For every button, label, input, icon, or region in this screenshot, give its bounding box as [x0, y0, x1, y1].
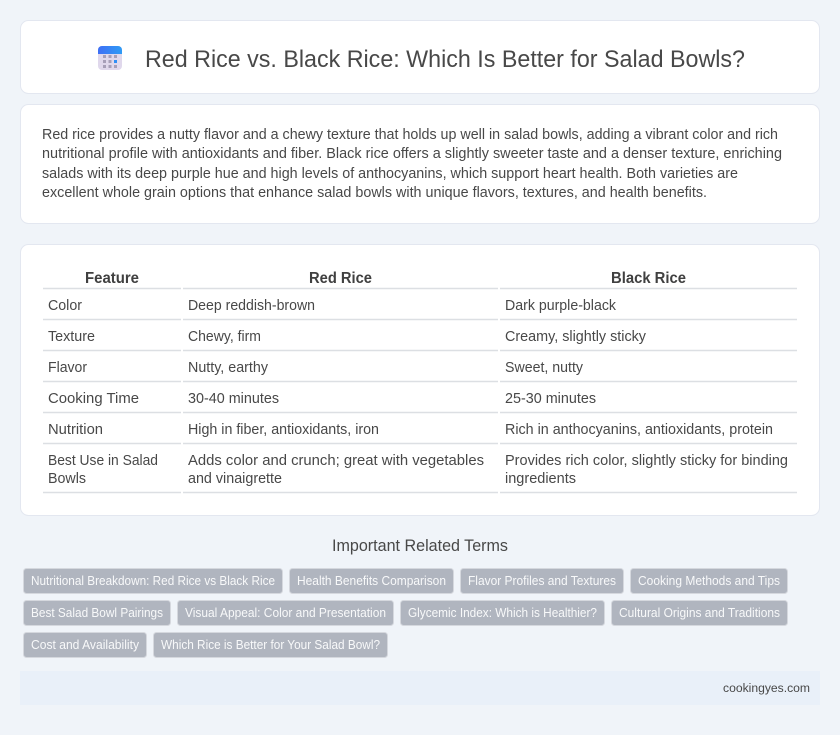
- footer source text: cookingyes.com: [723, 681, 810, 695]
- row: color: Dark purple-black: [505, 298, 617, 314]
- text block: intro paragraph: nutritional profile with antioxidants and fiber. Black rice offers a slightly sweeter taste and a denser texture, enriching: [42, 146, 782, 162]
- tag: [612, 600, 788, 626]
- table header: [85, 270, 686, 287]
- panel: introduction: [20, 104, 820, 224]
- tag: [24, 600, 170, 626]
- row: best use in salad bowls: [48, 453, 788, 487]
- title: Red Rice vs. Black Rice: Which Is Better for Salad Bowls?: [145, 46, 745, 73]
- row: color: Color: [48, 298, 82, 314]
- row: nutrition: High in fiber, antioxidants, iron: [188, 422, 379, 438]
- row: best use in salad bowls: ingredients: [505, 471, 576, 487]
- text block: intro paragraph: excellent whole grain options that enhance salad bowls with unique flavors, textures, and health benefits.: [42, 185, 707, 201]
- tag: Cultural Origins and Traditions: [619, 606, 780, 620]
- icon: calendar: [98, 46, 122, 70]
- row: cooking time: [48, 391, 596, 407]
- row: cooking time: Cooking Time: [48, 391, 139, 407]
- tag: Glycemic Index: Which is Healthier?: [408, 606, 597, 620]
- tag: Which Rice is Better for Your Salad Bowl?: [161, 638, 380, 652]
- tag: Visual Appeal: Color and Presentation: [185, 606, 386, 620]
- tag: [400, 600, 604, 626]
- row: best use in salad bowls: Best Use in Salad: [48, 453, 158, 469]
- row: texture: Creamy, slightly sticky: [505, 329, 647, 345]
- tag: Flavor Profiles and Textures: [468, 574, 616, 588]
- tag: Cooking Methods and Tips: [638, 574, 780, 588]
- row: best use in salad bowls: Provides rich color, slightly sticky for binding: [505, 453, 788, 469]
- row: texture: Chewy, firm: [188, 329, 261, 345]
- row: nutrition: Nutrition: [48, 422, 103, 438]
- tag: Nutritional Breakdown: Red Rice vs Black Rice: [31, 574, 275, 588]
- tag: Health Benefits Comparison: [297, 574, 446, 588]
- row: color: [48, 298, 617, 314]
- heading: important related terms: Important Related Terms: [332, 537, 508, 555]
- row: best use in salad bowls: and vinaigrette: [188, 471, 282, 487]
- tag: Cost and Availability: [31, 638, 140, 652]
- row: flavor: [48, 360, 584, 376]
- row: flavor: Nutty, earthy: [188, 360, 269, 376]
- panel: title header: [20, 20, 820, 94]
- row: cooking time: 25-30 minutes: [505, 391, 596, 407]
- tag: [24, 632, 146, 658]
- row: cooking time: 30-40 minutes: [188, 391, 279, 407]
- text block: intro paragraph: Red rice provides a nutty flavor and a chewy texture that holds up well in salad bowls, adding a vibrant color and rich: [42, 127, 778, 143]
- row: color: Deep reddish-brown: [188, 298, 315, 314]
- tag: [154, 632, 388, 658]
- row: flavor: Sweet, nutty: [505, 360, 584, 376]
- tag: [630, 568, 788, 594]
- row: best use in salad bowls: Adds color and crunch; great with vegetables: [188, 453, 484, 469]
- table header: Black Rice: [611, 270, 686, 287]
- text block: intro paragraph: salads with its deep purple hue and high levels of anthocyanins, which support heart health. Both varieties are: [42, 166, 738, 182]
- table header: Red Rice: [309, 270, 372, 287]
- tag: Best Salad Bowl Pairings: [31, 606, 163, 620]
- tag: [290, 568, 454, 594]
- row: nutrition: [48, 422, 773, 438]
- row: texture: Texture: [48, 329, 95, 345]
- row: texture: [48, 329, 647, 345]
- row: nutrition: Rich in anthocyanins, antioxidants, protein: [505, 422, 773, 438]
- table header: Feature: [85, 270, 139, 287]
- tag: [178, 600, 394, 626]
- tag: [24, 568, 282, 594]
- text block: intro paragraph: [42, 127, 782, 201]
- row: best use in salad bowls: Bowls: [48, 471, 86, 487]
- row: flavor: Flavor: [48, 360, 87, 376]
- tag: [460, 568, 624, 594]
- footer: [20, 671, 820, 705]
- tags: related terms: [24, 568, 788, 658]
- panel: comparison table: [20, 244, 820, 516]
